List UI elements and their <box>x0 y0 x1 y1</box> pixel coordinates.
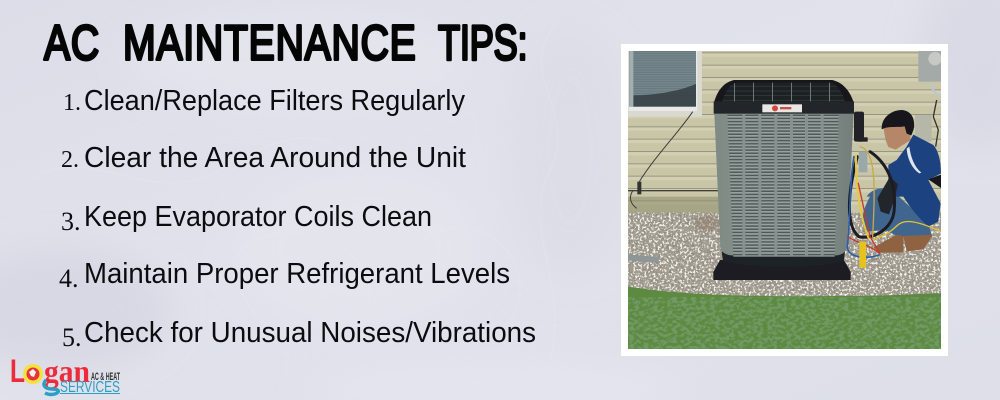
logo sun emblem <box>23 364 43 384</box>
logo teal swoosh <box>44 380 58 394</box>
brand badge <box>762 104 802 112</box>
shirt <box>888 135 941 227</box>
electrical meter box <box>915 51 942 147</box>
tip 5: Check for Unusual Noises/Vibrations <box>84 317 536 349</box>
tip 1: 1. <box>63 90 81 116</box>
white frame <box>621 44 948 356</box>
title: MAINTENANCE <box>123 16 416 71</box>
window <box>626 49 702 117</box>
unit top grille <box>714 80 854 103</box>
logo: Logan AC and Heat Services <box>10 353 120 396</box>
unit bottom trim <box>722 252 845 260</box>
house siding <box>628 51 941 214</box>
tip 4: 4. <box>59 264 78 293</box>
grass lawn <box>628 287 941 349</box>
unit cabinet <box>714 113 854 255</box>
face <box>884 126 910 150</box>
hair <box>882 110 914 135</box>
AC unit <box>713 80 854 280</box>
tip 3: 3. <box>61 207 80 236</box>
outdoor cable <box>628 112 718 208</box>
tip 2: 2. <box>61 147 79 173</box>
photo card <box>621 44 948 356</box>
jeans <box>863 188 932 237</box>
logo word: Services: SERVICES <box>60 379 120 396</box>
manifold gauge <box>854 112 868 268</box>
title: TIPS: <box>438 16 528 71</box>
tip 5: 5. <box>62 323 82 352</box>
unit base pad <box>713 260 851 280</box>
title: AC <box>44 16 99 71</box>
tip 1: Clean/Replace Filters Regularly <box>84 85 465 117</box>
tip 4: Maintain Proper Refrigerant Levels <box>84 258 510 290</box>
grey pipe <box>628 257 659 260</box>
tip 3: Keep Evaporator Coils Clean <box>84 201 432 233</box>
unit louvered grille <box>727 114 839 257</box>
gravel ground <box>628 213 941 298</box>
work boots <box>873 235 933 253</box>
tip list <box>59 85 536 352</box>
unit collar <box>714 101 854 114</box>
logo initial: L <box>10 353 25 389</box>
arms and gloves <box>877 177 898 214</box>
technician <box>863 110 941 253</box>
text: AC & HEAT <box>91 371 120 383</box>
logo letters: gan <box>44 353 90 389</box>
tip 2: Clear the Area Around the Unit <box>84 142 466 174</box>
title <box>44 16 528 71</box>
photo: technician servicing AC unit <box>626 49 942 349</box>
gauge hoses <box>847 147 940 257</box>
